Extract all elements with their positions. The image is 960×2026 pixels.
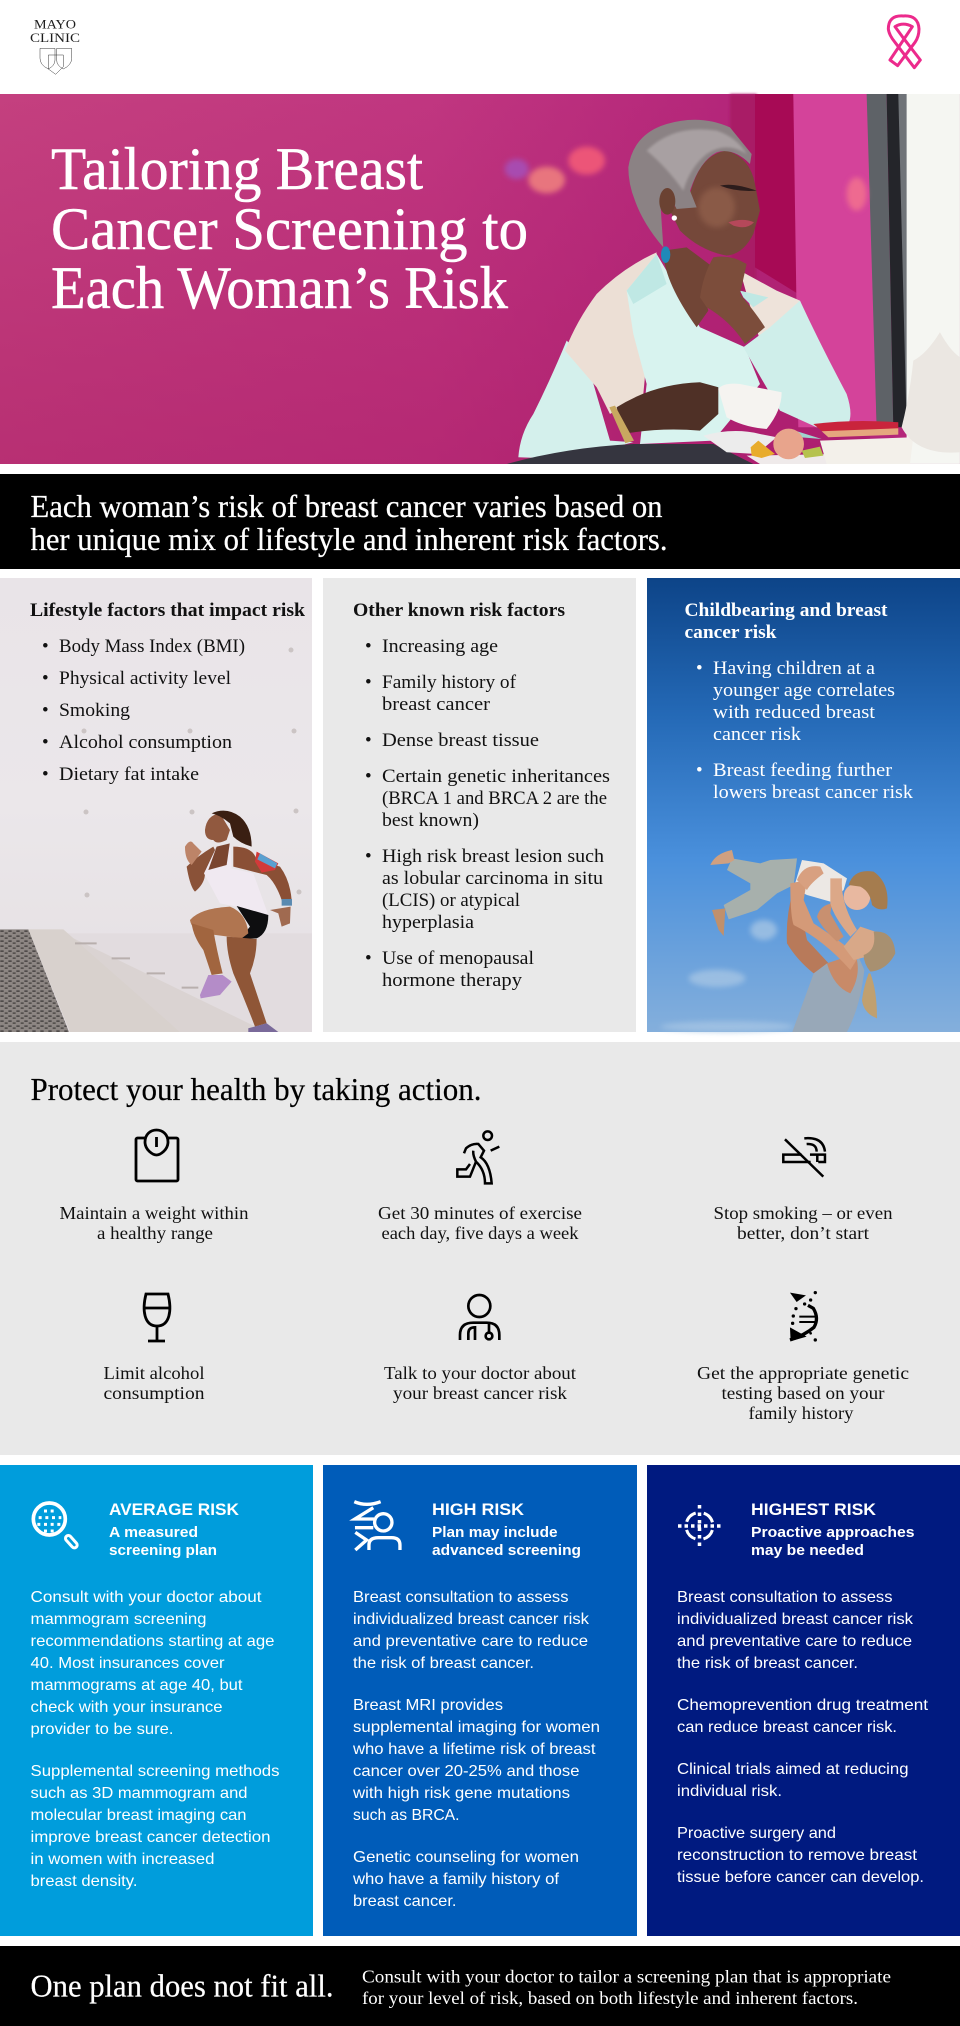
- captions: Maintain a weight within: [60, 1203, 248, 1223]
- body text: such as 3D mammogram and: [30, 1785, 248, 1802]
- captions: Talk to your doctor about: [384, 1363, 576, 1383]
- icon: DNA: [790, 1291, 817, 1342]
- body text: Clinical trials aimed at reducing: [677, 1761, 908, 1778]
- heading: Plan may include: [432, 1524, 558, 1541]
- heading: Proactive approaches: [751, 1524, 914, 1541]
- body text: Chemoprevention drug treatment: [677, 1697, 929, 1714]
- body text: Genetic counseling for women: [353, 1849, 579, 1866]
- body text: reconstruction to remove breast: [677, 1847, 918, 1864]
- bullet list: Dense breast tissue: [382, 730, 539, 751]
- body text: check with your insurance: [30, 1699, 223, 1716]
- captions: a healthy range: [97, 1223, 213, 1243]
- body text: the risk of breast cancer.: [353, 1655, 534, 1672]
- heading: may be needed: [751, 1542, 864, 1559]
- header logo: Mayo Clinic: [30, 18, 80, 74]
- bullet list: [365, 636, 610, 991]
- body text: [677, 1589, 929, 1886]
- bullet list: •: [42, 636, 49, 657]
- heading: HIGHEST RISK: [751, 1500, 877, 1519]
- intro banner: her unique mix of lifestyle and inherent risk factors.: [30, 521, 668, 557]
- bullet list: Alcohol consumption: [59, 732, 233, 753]
- body text: [352, 1589, 600, 1910]
- bullet list: •: [696, 760, 703, 781]
- body text: in women with increased: [30, 1851, 214, 1868]
- captions: testing based on your: [722, 1383, 884, 1403]
- body text: mammograms at age 40, but: [30, 1677, 243, 1694]
- body text: who have a family history of: [352, 1871, 560, 1888]
- body text: mammogram screening: [30, 1611, 206, 1628]
- captions: your breast cancer risk: [393, 1383, 567, 1403]
- body text: the risk of breast cancer.: [677, 1655, 858, 1672]
- photo: wall, column and window: [730, 94, 960, 464]
- photo: runner: [185, 811, 292, 1032]
- body text: individual risk.: [677, 1783, 782, 1800]
- body text: Breast consultation to assess: [677, 1589, 892, 1606]
- intro banner: [0, 474, 960, 569]
- captions: better, don’t start: [737, 1223, 869, 1243]
- bullet list: •: [365, 846, 372, 867]
- body text: Breast consultation to assess: [353, 1589, 568, 1606]
- bullet list: Family history of: [382, 672, 517, 693]
- bullet list: with reduced breast: [713, 702, 876, 723]
- bullet list: younger age correlates: [713, 680, 895, 701]
- heading: Other known risk factors: [353, 600, 565, 621]
- icon: scale: [136, 1130, 178, 1181]
- panel: childbearing: [647, 578, 960, 1032]
- bullet list: Body Mass Index (BMI): [59, 636, 245, 657]
- icon: no smoking: [783, 1138, 825, 1177]
- panel: average risk: [0, 1465, 313, 1936]
- bullet list: cancer risk: [713, 724, 802, 745]
- captions: each day, five days a week: [382, 1223, 578, 1243]
- body text: Supplemental screening methods: [30, 1763, 280, 1780]
- heading: A measured: [109, 1524, 198, 1541]
- panel: highest risk: [647, 1465, 960, 1936]
- body text: supplemental imaging for women: [353, 1719, 600, 1736]
- intro banner: Each woman’s risk of breast cancer varies based on: [30, 488, 662, 524]
- panel: protect your health: [0, 1042, 960, 1455]
- bullet list: •: [365, 730, 372, 751]
- body text: and preventative care to reduce: [677, 1633, 912, 1650]
- bullet list: [696, 658, 914, 803]
- bullet list: •: [365, 948, 372, 969]
- bullet list: •: [42, 668, 49, 689]
- footer banner: [0, 1946, 960, 2026]
- photo: light flares: [505, 147, 867, 211]
- bullet list: hyperplasia: [382, 912, 475, 933]
- photo: clouds: [660, 920, 794, 1032]
- icon: wine glass: [143, 1294, 170, 1341]
- bullet list: •: [42, 700, 49, 721]
- bullet list: High risk breast lesion such: [382, 846, 605, 867]
- body text: Breast MRI provides: [353, 1697, 503, 1714]
- panel: other known risk factors: [323, 578, 636, 1032]
- captions: family history: [748, 1403, 854, 1423]
- heading: screening plan: [109, 1542, 217, 1559]
- bullet list: •: [365, 672, 372, 693]
- heading: cancer risk: [684, 622, 777, 643]
- panel: lifestyle factors: [0, 578, 312, 1032]
- body text: provider to be sure.: [30, 1721, 174, 1738]
- header logo: Mayo Clinic: CLINIC: [30, 31, 80, 45]
- body text: can reduce breast cancer risk.: [677, 1719, 897, 1736]
- heading: HIGH RISK: [432, 1500, 525, 1519]
- captions: Get 30 minutes of exercise: [378, 1203, 582, 1223]
- bullet list: (BRCA 1 and BRCA 2 are the: [382, 788, 607, 809]
- body text: and preventative care to reduce: [353, 1633, 588, 1650]
- bullet list: Certain genetic inheritances: [382, 766, 610, 787]
- heading: [432, 1500, 581, 1559]
- bullet list: Having children at a: [713, 658, 876, 679]
- bullet list: breast cancer: [382, 694, 491, 715]
- bullet list: Use of menopausal: [382, 948, 534, 969]
- body text: molecular breast imaging can: [30, 1807, 246, 1824]
- title: Each Woman’s Risk: [51, 255, 508, 321]
- icon: DNA and person: [354, 1502, 400, 1550]
- footer banner: for your level of risk, based on both lifestyle and inherent factors.: [362, 1988, 858, 2008]
- body text: tissue before cancer can develop.: [677, 1869, 924, 1886]
- bullet list: best known): [382, 810, 479, 831]
- photo: mother lifting child: [710, 850, 895, 1032]
- captions: Limit alcohol: [104, 1363, 204, 1383]
- title: [51, 136, 528, 321]
- captions: [60, 1203, 909, 1423]
- bullet list: •: [42, 732, 49, 753]
- captions: Get the appropriate genetic: [697, 1363, 909, 1383]
- heading: Lifestyle factors that impact risk: [30, 600, 305, 621]
- bullet list: lowers breast cancer risk: [713, 782, 914, 803]
- captions: consumption: [104, 1383, 204, 1403]
- body text: Proactive surgery and: [677, 1825, 836, 1842]
- bullet list: •: [42, 764, 49, 785]
- heading: [751, 1500, 914, 1559]
- footer banner: Consult with your doctor to tailor a screening plan that is appropriate: [362, 1966, 891, 1986]
- header logo: Mayo Clinic: MAYO: [34, 18, 76, 32]
- icon: magnifier: [33, 1503, 74, 1545]
- heading: [109, 1500, 240, 1559]
- body text: with high risk gene mutations: [352, 1785, 570, 1802]
- bullet list: (LCIS) or atypical: [382, 890, 520, 911]
- bullet list: [42, 636, 245, 785]
- heading: Childbearing and breast: [684, 600, 888, 621]
- icon: doctor: [460, 1295, 499, 1340]
- body text: such as BRCA.: [353, 1807, 460, 1824]
- title: Tailoring Breast: [51, 136, 423, 202]
- title: Cancer Screening to: [51, 196, 528, 262]
- heading: [684, 600, 888, 643]
- heading: AVERAGE RISK: [109, 1500, 240, 1519]
- photo: wall bolts: [82, 648, 304, 980]
- bullet list: Increasing age: [382, 636, 498, 657]
- body text: improve breast cancer detection: [30, 1829, 270, 1846]
- body text: who have a lifetime risk of breast: [352, 1741, 596, 1758]
- photo: woman with cup: [507, 120, 960, 464]
- body text: individualized breast cancer risk: [677, 1611, 914, 1628]
- hero panel with photo: [0, 94, 960, 464]
- body text: 40. Most insurances cover: [30, 1655, 225, 1672]
- heading: advanced screening: [432, 1542, 581, 1559]
- panel: high risk: [323, 1465, 637, 1936]
- bullet list: hormone therapy: [382, 970, 523, 991]
- body text: breast cancer.: [353, 1893, 456, 1910]
- body text: individualized breast cancer risk: [353, 1611, 590, 1628]
- footer banner: One plan does not fit all.: [30, 1968, 334, 2004]
- bullet list: Smoking: [59, 700, 131, 721]
- heading: Protect your health by taking action.: [30, 1071, 482, 1107]
- bullet list: •: [365, 636, 372, 657]
- bullet list: Breast feeding further: [713, 760, 893, 781]
- body text: [30, 1589, 280, 1890]
- captions: Stop smoking – or even: [714, 1203, 892, 1223]
- photo: stairs and cobbles: [0, 929, 312, 1032]
- icon: pink ribbon: [888, 16, 920, 68]
- body text: recommendations starting at age: [30, 1633, 275, 1650]
- icon: runner: [457, 1131, 499, 1183]
- body text: Consult with your doctor about: [30, 1589, 262, 1606]
- bullet list: as lobular carcinoma in situ: [382, 868, 604, 889]
- bullet list: •: [365, 766, 372, 787]
- body text: breast density.: [30, 1873, 138, 1890]
- body text: cancer over 20-25% and those: [353, 1763, 580, 1780]
- bullet list: Dietary fat intake: [59, 764, 199, 785]
- icon: target: [678, 1505, 722, 1548]
- bullet list: •: [696, 658, 703, 679]
- bullet list: Physical activity level: [59, 668, 231, 689]
